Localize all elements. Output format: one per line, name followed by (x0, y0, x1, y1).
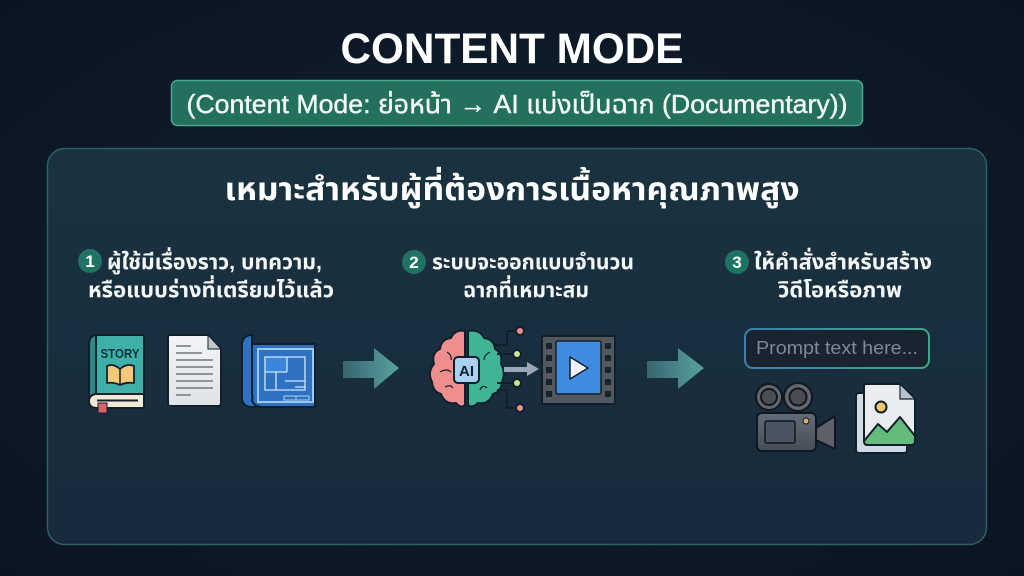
step 3 text: 3 (732, 253, 742, 272)
step 1 text: 1 (85, 252, 95, 271)
arrow: brain to video (504, 362, 539, 376)
icon: AI brain (430, 327, 524, 412)
step 2 text: ฉากที่เหมาะสม (463, 275, 589, 302)
step 1 text: หรือแบบร่างที่เตรียมไว้แล้ว (88, 275, 334, 302)
step 3 text (725, 248, 932, 302)
step 2 text: ระบบจะออกแบบจำนวน (432, 251, 634, 274)
icon: film with play button (542, 336, 615, 404)
step 3 text: ให้คำสั่งสำหรับสร้าง (754, 248, 932, 274)
title: CONTENT MODE (340, 25, 684, 73)
prompt input box: Prompt text here... (756, 338, 918, 358)
step 2 text: 2 (409, 253, 419, 272)
icon: video camera (756, 383, 835, 451)
icon: document (168, 335, 221, 406)
prompt input box (745, 329, 929, 368)
icon: story book: STORY (100, 347, 140, 361)
step 2 text (402, 250, 634, 302)
step 3 text: วิดีโอหรือภาพ (777, 279, 902, 302)
subtitle badge (172, 80, 862, 126)
panel: content mode workflow (48, 148, 986, 544)
icon: blueprint (242, 335, 315, 407)
subtitle badge: (Content Mode: ย่อหน้า → AI แบ่งเป็นฉาก (Documentary)) (186, 89, 848, 119)
icon: image file stack (856, 384, 915, 453)
arrow: step 1 to step 2 (343, 348, 399, 389)
arrow: step 2 to step 3 (647, 348, 704, 389)
panel heading: เหมาะสำหรับผู้ที่ต้องการเนื้อหาคุณภาพสูง (224, 166, 800, 208)
step 1 text: ผู้ใช้มีเรื่องราว, บทความ, (107, 247, 322, 275)
icon: AI brain: AI (459, 363, 474, 380)
step 1 text (78, 247, 334, 302)
icon: story book (89, 335, 144, 413)
